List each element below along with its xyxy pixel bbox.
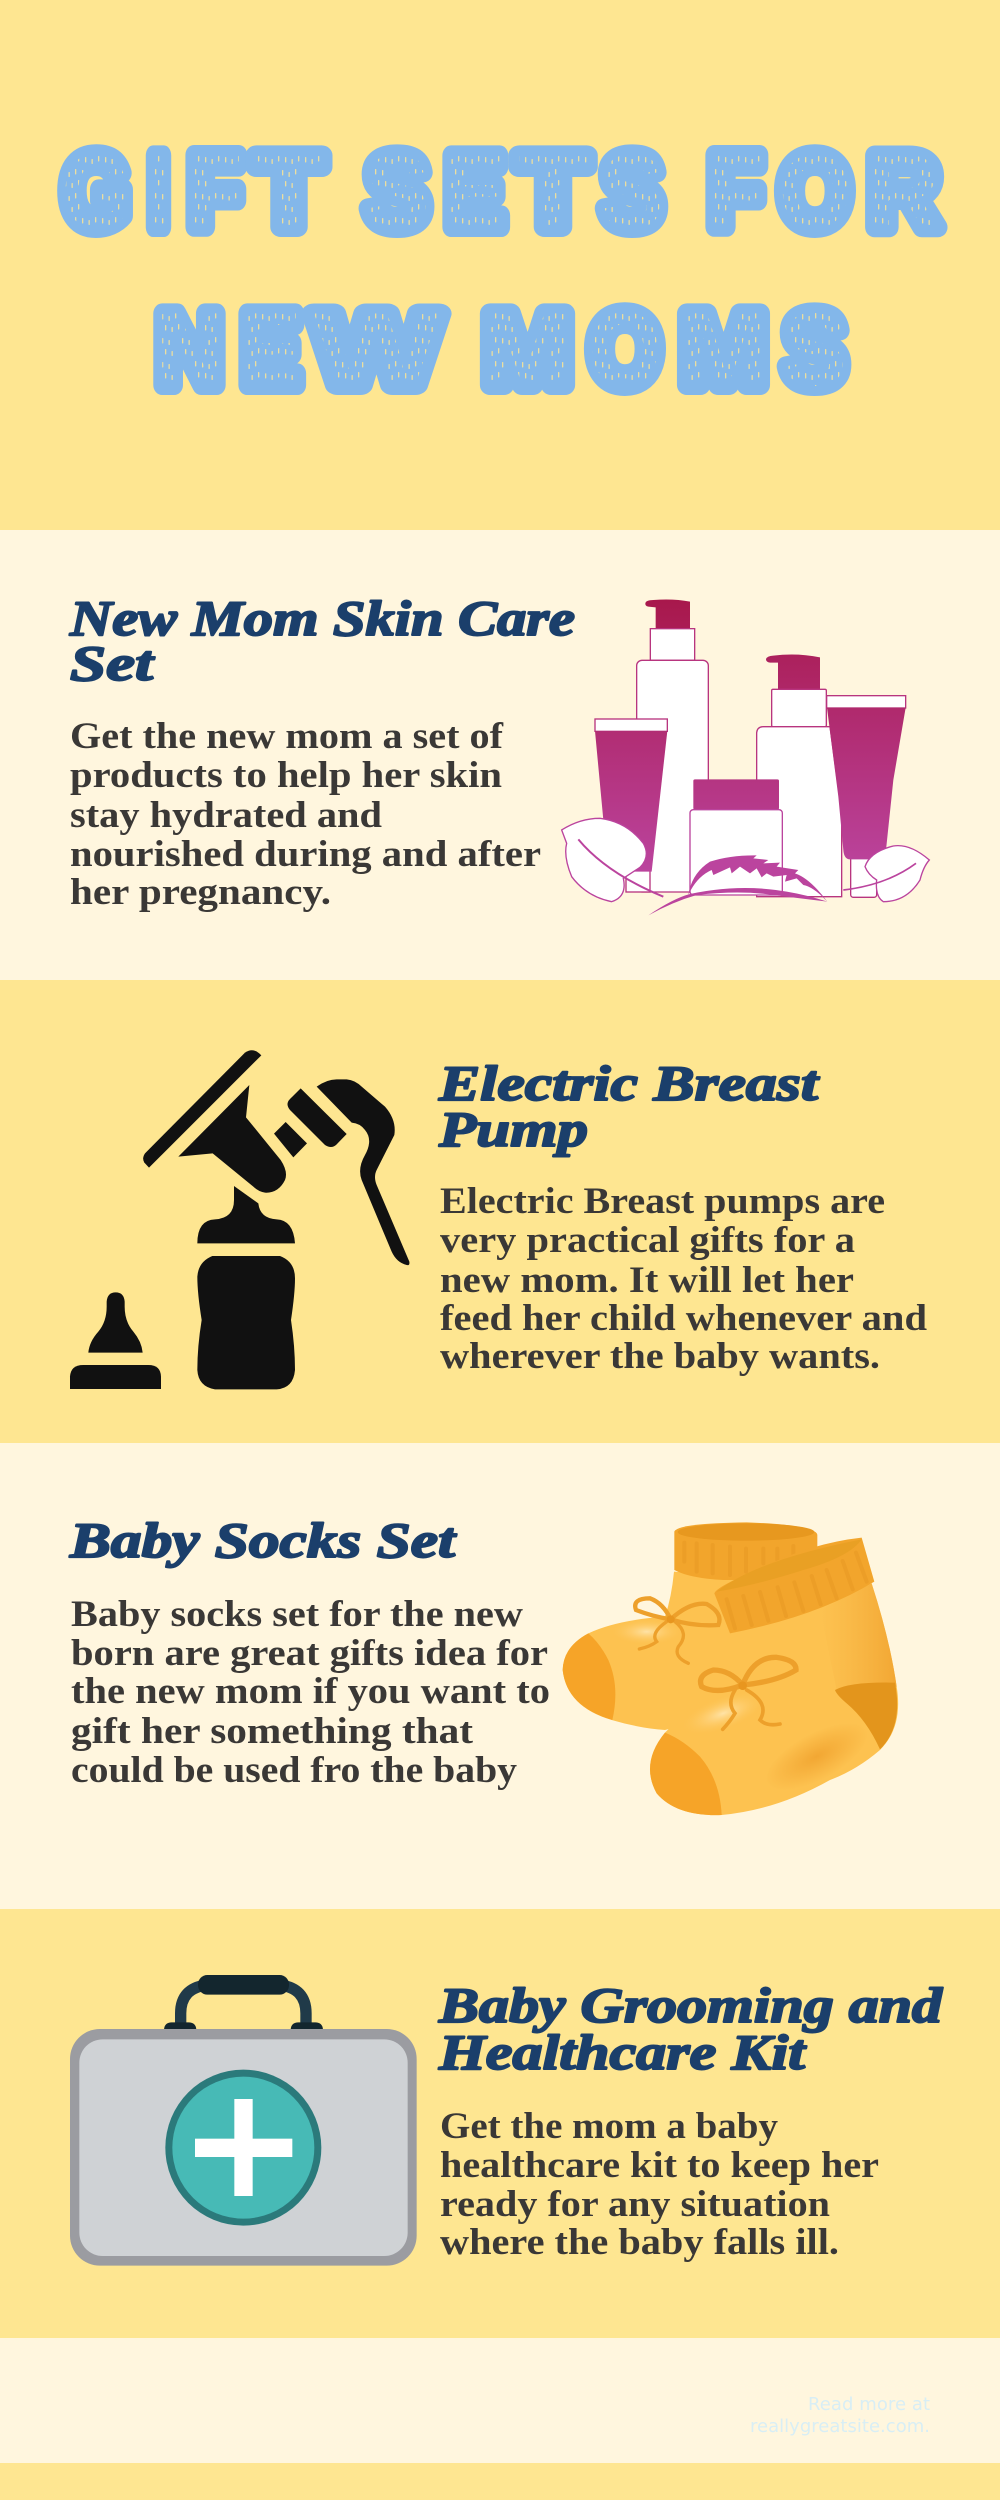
heading: skin care: New Mom Skin Care [69, 590, 575, 646]
title: M [680, 292, 767, 408]
title: F [188, 134, 242, 250]
panel: healthcare kit background [0, 1909, 1000, 2338]
title: I [148, 134, 169, 250]
bows [635, 1598, 796, 1729]
text: breast pump description: feed her child whenever and [440, 1298, 927, 1339]
text: baby socks description: born are great gifts idea for [71, 1633, 548, 1674]
heading: healthcare kit [438, 1977, 943, 2080]
text: skin care description [70, 716, 541, 913]
heading: electric breast pump [438, 1055, 821, 1157]
panel: baby socks background [0, 1443, 1000, 1909]
text: breast pump description: very practical gifts for a [440, 1220, 855, 1261]
heading: skin care [69, 590, 575, 691]
text: healthcare kit description: where the baby falls ill. [440, 2222, 839, 2263]
back sock [563, 1522, 817, 1730]
text: breast pump description [440, 1181, 927, 1377]
text: skin care description: Get the new mom a set of [70, 716, 504, 757]
icon: breast pump [70, 1050, 409, 1389]
footer: read more link [750, 2394, 930, 2437]
panel: header background [0, 0, 1000, 530]
heading: electric breast pump: Pump [438, 1101, 588, 1157]
text: baby socks description [71, 1594, 550, 1791]
title: W [314, 292, 440, 408]
icon: skin care products [562, 599, 929, 915]
title: T [255, 134, 323, 250]
front sock [650, 1538, 898, 1815]
panel: breast pump background [0, 980, 1000, 1443]
heading: skin care: Set [70, 635, 156, 691]
text: baby socks description: could be used fro the baby [71, 1750, 518, 1791]
text: breast pump description: wherever the baby wants. [440, 1336, 880, 1377]
title: N [156, 292, 223, 408]
text: healthcare kit description: Get the mom a baby [440, 2106, 779, 2147]
heading: healthcare kit: Baby Grooming and [438, 1977, 943, 2033]
text: skin care description: stay hydrated and [70, 795, 382, 836]
handle [164, 1975, 323, 2029]
title: O [779, 134, 851, 250]
panel: footer background [0, 2338, 1000, 2463]
text: skin care description: nourished during and after [70, 834, 541, 875]
title: E [445, 134, 505, 250]
title: G [62, 134, 130, 250]
icon: baby socks [563, 1522, 898, 1815]
title: T [518, 134, 588, 250]
title: O [589, 292, 661, 408]
heading: healthcare kit: Healthcare Kit [438, 2024, 808, 2080]
title: S [365, 134, 429, 250]
title: E [241, 292, 301, 408]
icon: healthcare kit [70, 1975, 417, 2266]
footer: read more link: reallygreatsite.com. [750, 2416, 930, 2437]
heading: baby socks: Baby Socks Set [69, 1512, 458, 1568]
footer: read more link: Read more at [808, 2394, 930, 2415]
medical cross badge [165, 2070, 321, 2226]
text: baby socks description: Baby socks set for the new [71, 1594, 523, 1635]
case body [70, 2029, 417, 2266]
text: skin care description: products to help her skin [70, 755, 502, 796]
text: breast pump description: Electric Breast pumps are [440, 1181, 885, 1222]
text: skin care description: her pregnancy. [70, 872, 331, 913]
text: baby socks description: the new mom if you want to [71, 1671, 550, 1712]
text: healthcare kit description [440, 2106, 879, 2263]
text: healthcare kit description: ready for any situation [440, 2184, 830, 2225]
title: S [783, 292, 846, 408]
title [62, 134, 940, 408]
heading: electric breast pump: Electric Breast [438, 1055, 821, 1111]
title: R [868, 134, 940, 250]
panel: skin care background [0, 530, 1000, 980]
text: breast pump description: new mom. It will let her [440, 1260, 854, 1301]
text: baby socks description: gift her something that [71, 1711, 474, 1752]
title: S [601, 134, 663, 250]
text: healthcare kit description: healthcare kit to keep her [440, 2145, 879, 2186]
title: M [483, 292, 572, 408]
title: F [708, 134, 763, 250]
